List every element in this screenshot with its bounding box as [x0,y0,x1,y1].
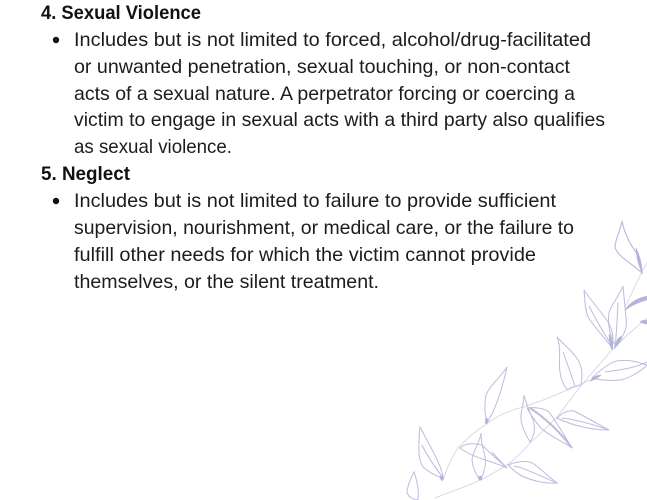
botanical illustration: leafy branch [407,221,647,500]
text block: neglect description [74,190,574,293]
branch stems [435,262,647,498]
text block: neglect description: themselves, or the silent treatment. [74,271,379,293]
text block: sexual violence description [74,29,605,158]
text block: sexual violence description: acts of a sexual nature. A perpetrator forcing or coercing a [74,83,575,105]
bullet marker: sexual violence [53,37,59,43]
text block: sexual violence description: as sexual violence. [74,136,232,158]
bullet marker: neglect [53,198,59,204]
text block: sexual violence description: Includes but is not limited to forced, alcohol/drug-facilitated [74,29,591,51]
text block: sexual violence description: or unwanted penetration, sexual touching, or non-contact [74,56,571,78]
leaf cluster: lower left [407,427,444,500]
text block: neglect description: fulfill other needs for which the victim cannot provide [74,244,536,266]
heading: 4. Sexual Violence: 4. Sexual Violence [41,2,201,24]
text block: neglect description: Includes but is not limited to failure to provide sufficient [74,190,557,212]
heading: 5. Neglect: 5. Neglect [41,163,130,185]
leaf cluster: lower centre [460,367,557,483]
leaf cluster: centre [521,395,609,448]
text block: sexual violence description: victim to engage in sexual acts with a third party also qualifies [74,109,605,131]
leaf cluster: middle right [557,337,647,390]
leaf cluster: upper right [584,221,647,350]
text block: neglect description: supervision, nourishment, or medical care, or the failure to [74,217,574,239]
